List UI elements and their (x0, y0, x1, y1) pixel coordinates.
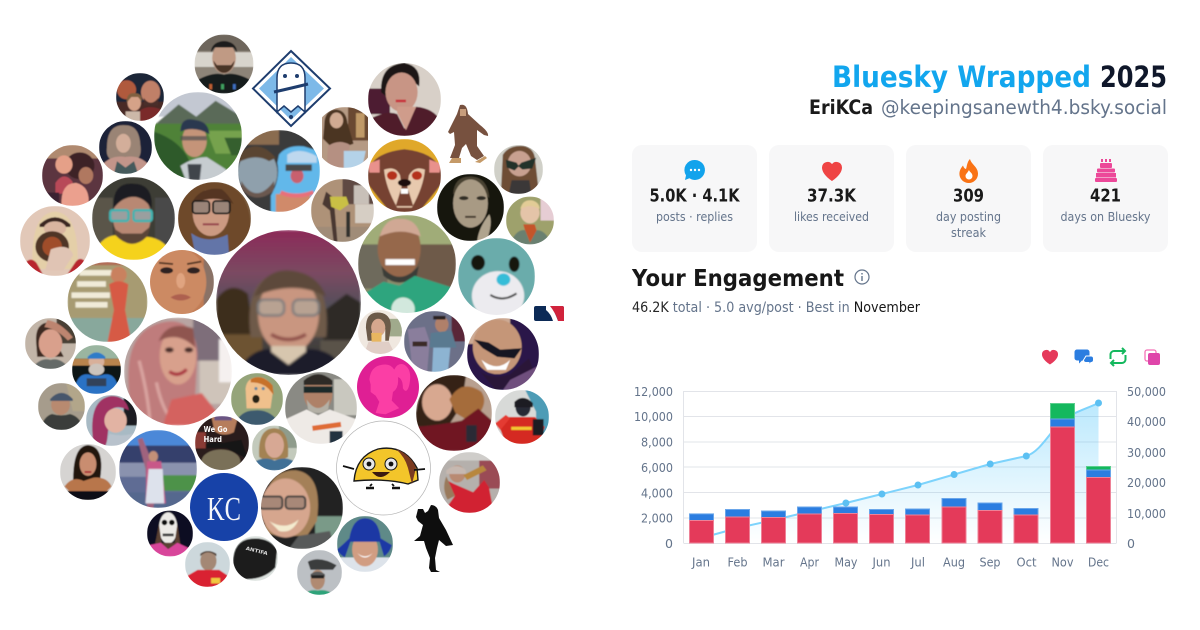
avatar: man with sunglasses in car (285, 372, 357, 444)
right axis labels: 50,000 (1127, 385, 1166, 399)
bar: Mar (762, 511, 786, 543)
avatar: smiling woman hand on head (25, 318, 76, 369)
month labels: Mar (762, 556, 785, 570)
avatar: couple at carnival (116, 73, 164, 121)
stat card: days on Bluesky: days on Bluesky (1060, 209, 1151, 224)
avatar: man in mountain valley (154, 92, 242, 180)
icon: chat bubble (684, 160, 705, 180)
bar: Sep (978, 503, 1002, 543)
avatar: teal plush bear (458, 238, 535, 315)
month labels: Sep (980, 556, 1000, 570)
stat card: day posting streak: 309 (953, 186, 984, 206)
stat card: likes received (769, 145, 894, 252)
avatar: woman with long brown hair (322, 107, 368, 168)
engagement chart (634, 385, 1166, 570)
icon: quotes (1145, 350, 1160, 365)
user name and handle: @keepingsanewth4.bsky.social (881, 96, 1167, 119)
avatar: dark haired woman (60, 444, 116, 500)
heading: your engagement: Your Engagement (631, 264, 844, 292)
bar: Jul (906, 509, 930, 543)
avatar: man in blue hoodie and cap (72, 345, 121, 394)
stat card: posts and replies: 5.0K · 4.1K (650, 186, 740, 206)
avatar: We Go Hard graphic: We Go (204, 425, 227, 434)
left axis labels: 0 (665, 537, 673, 551)
title: Bluesky Wrapped (832, 60, 1091, 94)
left axis labels: 2,000 (641, 512, 673, 526)
grid lines (684, 391, 1116, 544)
avatar: fan at baseball stadium (119, 430, 197, 508)
avatar: man with clown statue (238, 130, 320, 212)
month labels: Nov (1052, 556, 1074, 570)
avatar: blonde woman in denim (252, 426, 297, 470)
avatar: man in red Chiefs hoodie (185, 542, 230, 587)
icon: replies (1074, 350, 1094, 365)
line end point (1095, 400, 1102, 406)
avatar: woman with dog (416, 375, 492, 451)
left axis labels (634, 385, 673, 551)
avatar: bearded man in dark shirt (194, 34, 254, 94)
avatar: We Go Hard graphic: Hard (204, 435, 222, 444)
avatar: Ferrari driver (495, 390, 549, 444)
right axis labels (1127, 385, 1166, 551)
avatar: taco mascot (336, 421, 430, 515)
stat card: day posting streak: day posting (936, 209, 1001, 224)
stat card: days on Bluesky: 421 (1090, 186, 1121, 206)
month labels: Oct (1016, 556, 1037, 570)
month labels: Feb (728, 556, 748, 570)
chart legend icons (1042, 348, 1160, 366)
avatar: man in blue bucket hat (337, 516, 393, 572)
icon: birthday cake (1095, 159, 1117, 182)
avatar: woman with magenta hair (86, 395, 137, 446)
icon: reposts (1110, 348, 1126, 366)
stat card: day posting streak: streak (951, 225, 987, 240)
icon: flame (959, 159, 978, 183)
avatar: black and white portrait (437, 174, 504, 241)
avatar: couple in purple light (42, 145, 103, 206)
avatar: smiling woman with glasses and gray tee (261, 467, 343, 549)
icon: info (855, 270, 869, 284)
icon: heart (822, 162, 842, 181)
avatar: woman with curly hair and glasses (178, 182, 251, 255)
avatar: woman with long pink hair (124, 318, 232, 426)
right axis labels: 20,000 (1127, 476, 1166, 490)
avatar: KC Royals logo (190, 473, 258, 541)
user name and handle: EriKCa (809, 96, 873, 119)
line data points (842, 452, 1030, 506)
avatar: Hank Hill cartoon (231, 373, 283, 425)
bar: Aug (942, 498, 966, 543)
stat card: days on Bluesky (1043, 145, 1168, 252)
bar: Oct (1014, 508, 1038, 543)
avatar: toddler with scarf (506, 196, 554, 244)
right axis labels: 10,000 (1127, 507, 1166, 521)
avatar: woman in maroon top (368, 63, 441, 136)
month labels: Jul (910, 556, 925, 570)
bar: Dec (1086, 466, 1110, 543)
avatar: woman with masked sunglasses (494, 145, 543, 194)
avatar: woman kicking on porch (311, 179, 374, 242)
avatar: man with cap and headset (38, 383, 85, 430)
icon: MLB logo (534, 306, 564, 321)
stat card: posts and replies: posts · replies (656, 209, 733, 224)
avatar: action figures (404, 311, 465, 372)
right axis labels: 30,000 (1127, 446, 1166, 460)
left axis labels: 6,000 (641, 461, 673, 475)
avatar: woman in red drinking (439, 452, 500, 513)
month labels: Jun (872, 556, 890, 570)
avatar: KC Royals logo: KC (207, 491, 241, 528)
icon: ghost baseball badge (253, 51, 330, 126)
avatar: pink Barbie silhouette (357, 356, 419, 418)
bar: May (834, 507, 858, 543)
avatar: black ANTIFA cap (233, 536, 278, 581)
avatar: smiling man in green shirt (358, 215, 456, 313)
avatar: black ANTIFA cap: ANTIFA (245, 546, 268, 557)
left axis labels: 8,000 (641, 436, 673, 450)
month labels: Aug (943, 556, 965, 570)
left axis labels: 10,000 (634, 410, 673, 424)
engagement summary: 46.2K total · 5.0 avg/post · Best in November (632, 300, 920, 316)
cumulative area (702, 403, 1098, 543)
bar: Jun (870, 510, 894, 543)
icon: likes (1042, 350, 1058, 364)
left axis labels: 4,000 (641, 486, 673, 500)
avatar: We Go Hard graphic (195, 416, 249, 470)
avatar: blonde woman on dark background (99, 121, 152, 174)
avatar: large woman with glasses under aurora (216, 230, 361, 375)
month labels: Dec (1088, 556, 1109, 570)
left axis labels: 12,000 (634, 385, 673, 399)
avatar: cartoon rat on yellow (368, 139, 441, 212)
avatar: pouting face close-up (150, 250, 214, 314)
icon: bigfoot (448, 105, 488, 163)
cumulative line (702, 403, 1098, 538)
stat card: day posting streak (906, 145, 1031, 252)
avatar: smiling man with glasses in purple tone (467, 318, 539, 390)
month labels (691, 556, 1109, 570)
stat card: posts and replies (632, 145, 757, 252)
avatar: vintage poster woman (68, 262, 148, 342)
month labels: Apr (800, 556, 819, 570)
avatar: woman with beer (358, 310, 402, 354)
stat card: likes received: 37.3K (807, 186, 857, 206)
avatar: man with sunglasses and statue (297, 550, 342, 595)
stat card: likes received: likes received (794, 209, 869, 224)
icon: Darth Vader silhouette pin-up (414, 505, 453, 572)
right axis labels: 40,000 (1127, 415, 1166, 429)
month labels: Jan (691, 556, 710, 570)
bar: Apr (798, 507, 822, 543)
bar: Feb (726, 510, 750, 543)
month labels: May (834, 556, 858, 570)
avatar: man with teal glasses and yellow shirt (92, 177, 175, 260)
bar: Nov (1050, 404, 1074, 543)
avatar cluster (20, 34, 564, 595)
bar: Jan (690, 514, 714, 543)
avatar: skull face paint (147, 510, 193, 556)
stacked bars (690, 404, 1110, 543)
right axis labels: 0 (1127, 537, 1135, 551)
title: 2025 (1100, 60, 1167, 94)
avatar: woman with mug (20, 206, 90, 276)
